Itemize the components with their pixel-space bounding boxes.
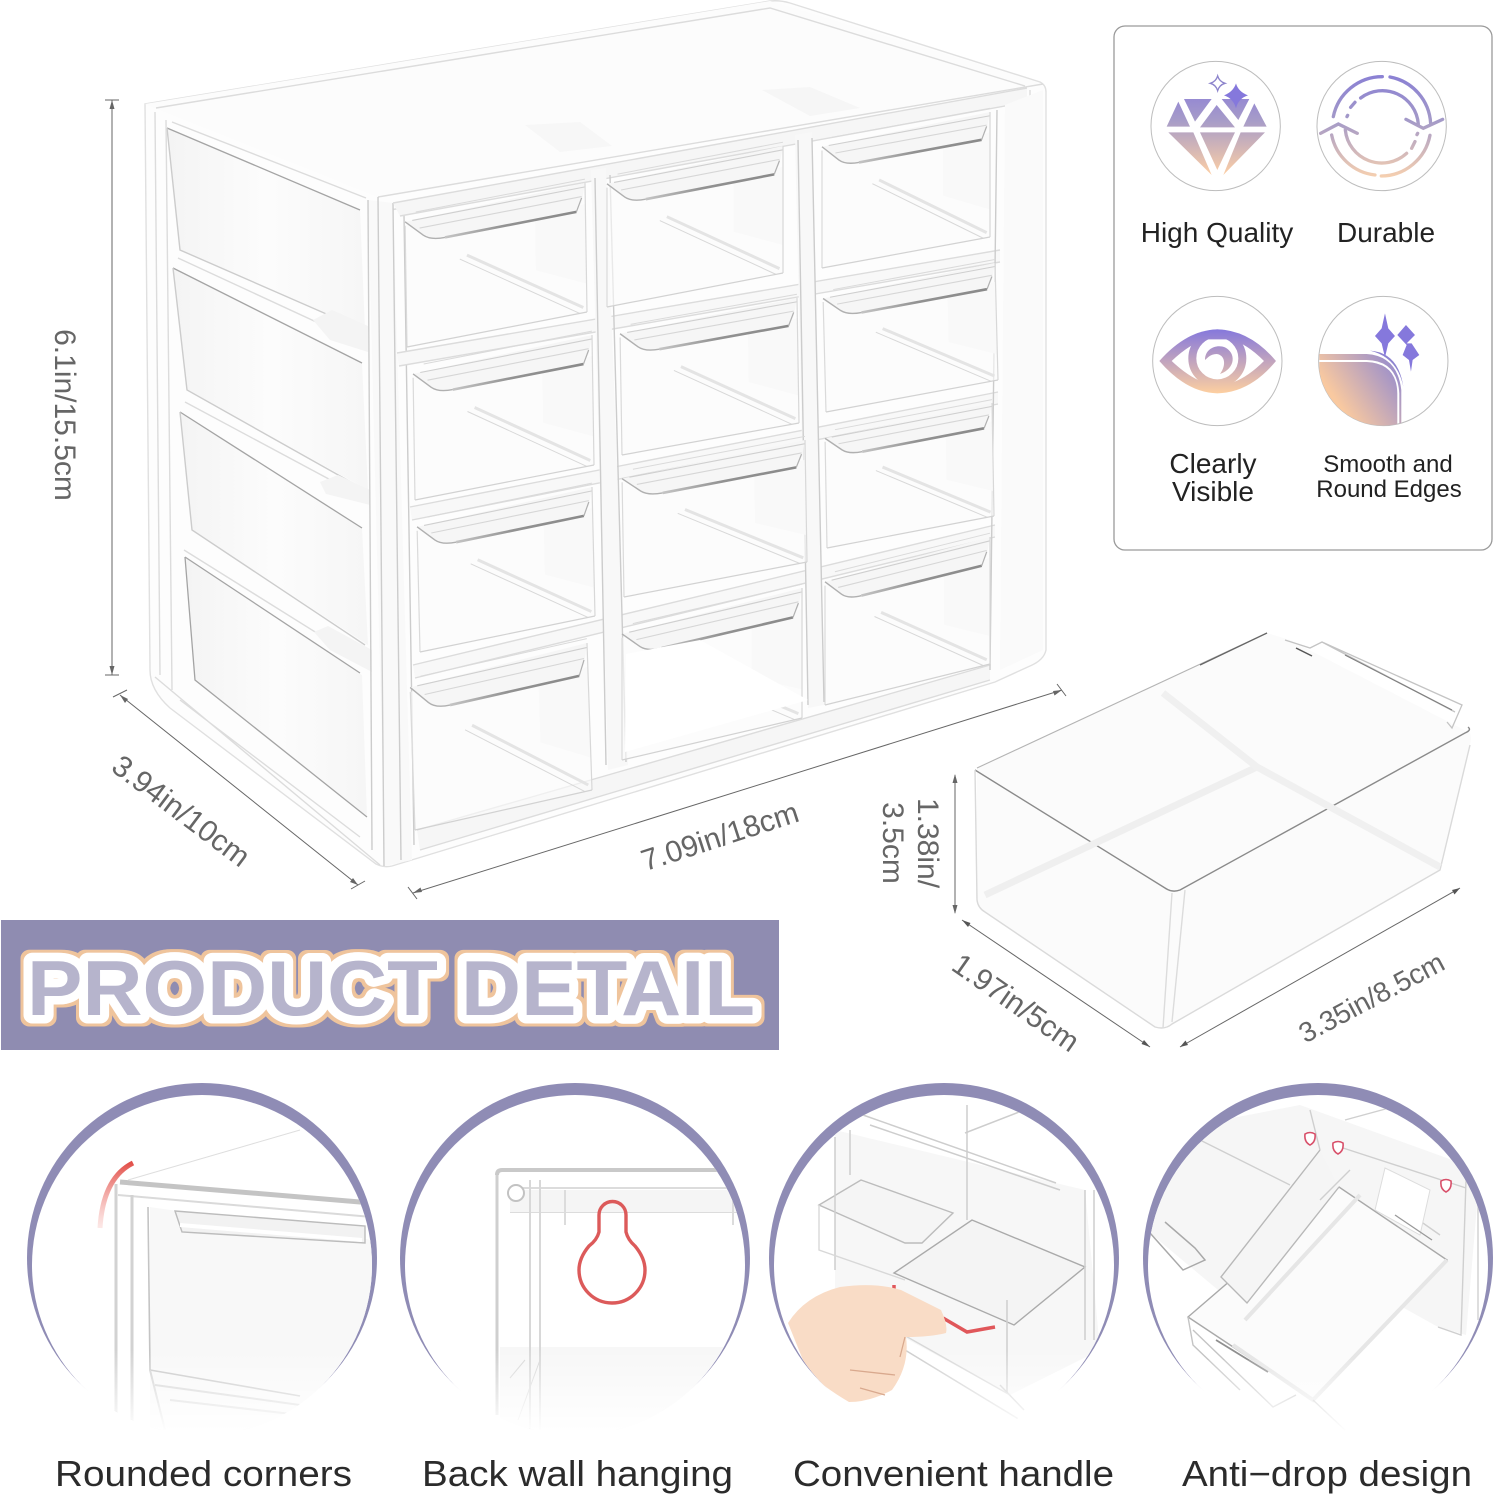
drawer row 3 [417, 400, 994, 652]
detail: convenient handle [769, 1083, 1140, 1494]
banner: product detail [1, 920, 779, 1050]
photo: drawers tilted [1150, 1105, 1479, 1420]
drawer row 1 [405, 108, 990, 347]
photo: corner close-up [74, 1130, 372, 1420]
icon: rounded edge [1319, 296, 1448, 427]
top face [145, 1, 1043, 210]
detail: anti-drop design [1140, 1083, 1494, 1494]
label: Clearly [1169, 448, 1257, 479]
feature: high quality [1141, 61, 1293, 248]
dimension: height [48, 100, 119, 675]
drawer row 4 [410, 533, 990, 830]
dimension: width [408, 684, 1066, 899]
side drawer 4 [184, 550, 372, 817]
icon: hand [788, 1285, 946, 1402]
label: Visible [1172, 476, 1254, 507]
photo: back panel [448, 1168, 737, 1429]
organizer body silhouette [145, 1, 1046, 867]
dimension: depth: 3.94in/10cm [106, 749, 256, 874]
keyhole mark [579, 1202, 645, 1303]
drawer row 2 [413, 259, 998, 500]
drawer body [976, 633, 1471, 1028]
caption: Rounded corners [55, 1453, 352, 1494]
photo: pulled out drawers [818, 1105, 1098, 1418]
dimension: drawer width: 3.35in/8.5cm [1293, 946, 1450, 1049]
feature card [1114, 26, 1492, 550]
dimension: drawer depth: 1.97in/5cm [946, 948, 1085, 1059]
dimension: depth [106, 690, 365, 889]
icon: diamond [1151, 61, 1280, 191]
banner title: PRODUCT DETAIL [27, 944, 755, 1032]
drawer lines [975, 633, 1470, 1028]
side drawer 2 [173, 258, 368, 490]
detail: rounded corners [20, 1083, 390, 1494]
dimension: height: 6.1in/15.5cm [48, 329, 81, 501]
dimension: width: 7.09in/18cm [637, 796, 803, 878]
red corner mark [100, 1163, 133, 1228]
feature: smooth edges [1316, 296, 1462, 503]
dimension: drawer depth [946, 920, 1150, 1059]
single drawer photo [975, 633, 1471, 1028]
main organizer photo [145, 1, 1046, 867]
label: Round Edges [1316, 476, 1462, 503]
label: High Quality [1141, 217, 1293, 248]
feature: clearly visible [1153, 296, 1282, 507]
label: Smooth and [1323, 451, 1453, 478]
detail: back wall hanging [400, 1083, 770, 1494]
caption: Convenient handle [793, 1453, 1114, 1494]
left side drawers [155, 112, 380, 865]
front rails and posts [368, 88, 1043, 866]
dimension: drawer height: 1.38in/ [911, 798, 944, 889]
side drawer 3 [180, 402, 370, 645]
icon: eye [1153, 296, 1282, 426]
side drawer 1 [167, 122, 366, 330]
caption: Back wall hanging [422, 1453, 733, 1494]
dimension: drawer height: 3.5cm [876, 802, 909, 884]
dimension: drawer height [876, 774, 958, 914]
icon: circular arrows [1317, 61, 1446, 191]
hand creases [850, 1337, 905, 1395]
dimension: drawer width [1180, 888, 1460, 1049]
feature: durable [1317, 61, 1446, 248]
red stop marks [1305, 1132, 1451, 1192]
label: Durable [1337, 217, 1435, 248]
caption: Anti−drop design [1182, 1453, 1472, 1494]
red handle mark [894, 1285, 995, 1332]
